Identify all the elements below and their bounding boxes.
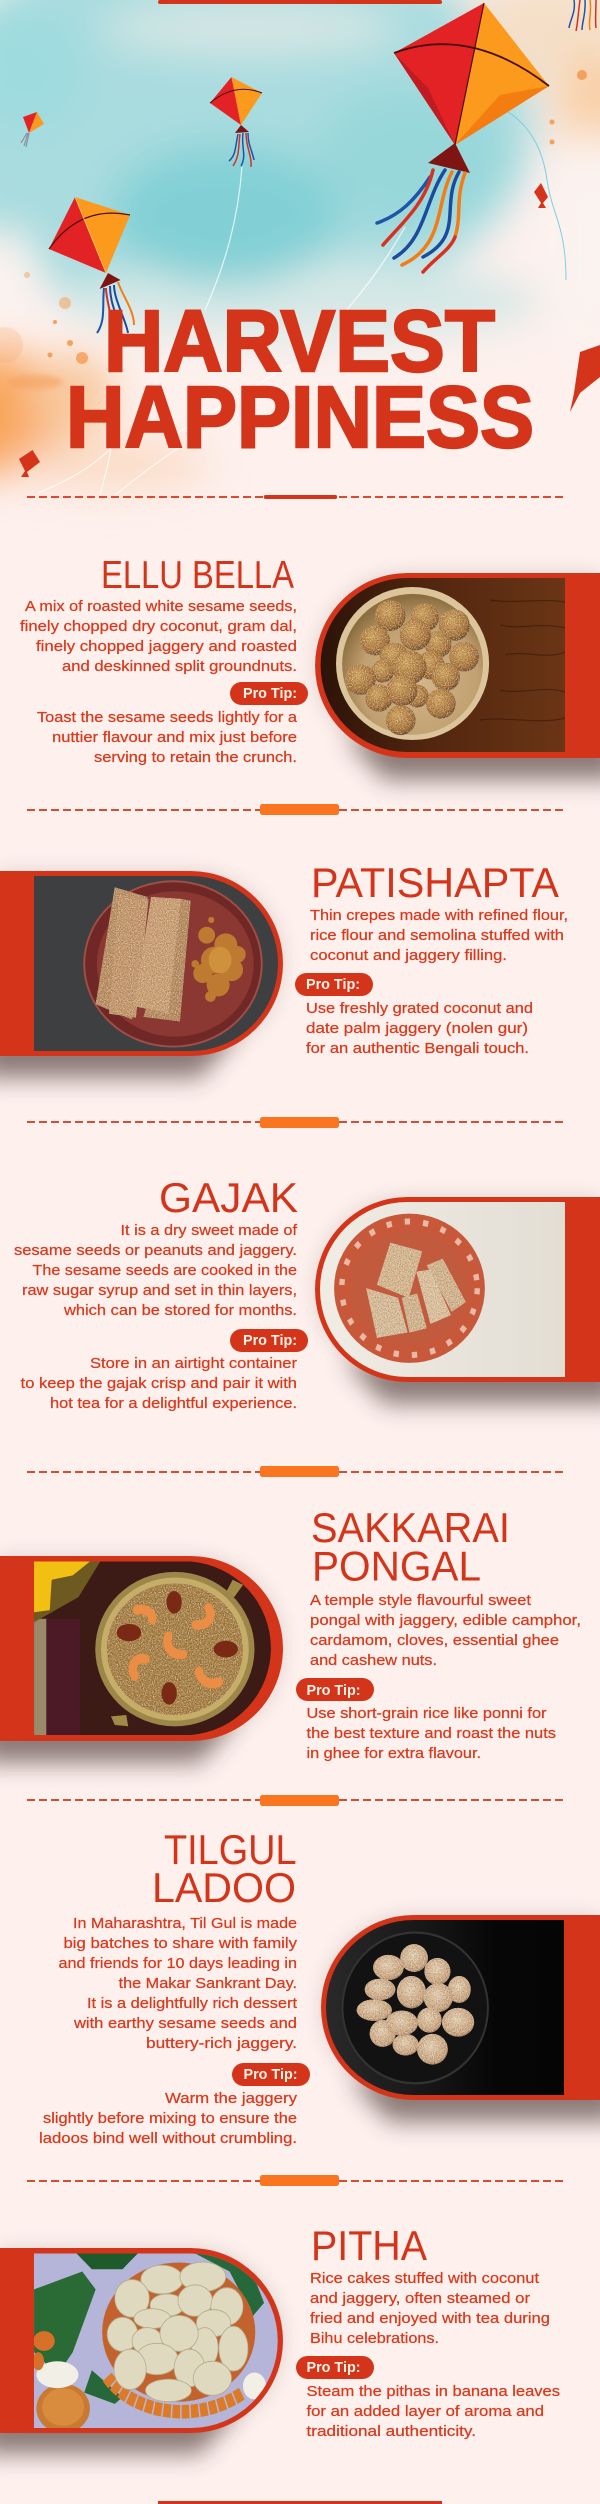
kite: lower left [49, 197, 134, 333]
image shadow [321, 1915, 600, 2122]
description: It is a delightfully rich dessert [87, 1995, 298, 2012]
food photo: pitha on clay plate [33, 2253, 284, 2433]
pro tip badge: Pro Tip: [306, 1682, 360, 1699]
pro tip badge [296, 1678, 374, 1701]
description: rice flour and semolina stuffed with [310, 927, 564, 944]
description: big batches to share with family [64, 1935, 298, 1952]
kite: large top right [377, 3, 549, 272]
pro tip badge [296, 2356, 374, 2379]
pro tip badge: Pro Tip: [244, 2066, 298, 2083]
description: Rice cakes stuffed with coconut [310, 2270, 540, 2287]
divider 2 [27, 804, 563, 815]
heading: ELLU BELLA [101, 554, 294, 597]
description: and cashew nuts. [310, 1652, 437, 1669]
pro tip badge: Pro Tip: [306, 2359, 360, 2376]
description: finely chopped jaggery and roasted [36, 638, 297, 655]
icon: small kite bottom left [19, 450, 40, 477]
panel: sakkarai pongal [0, 1504, 581, 1763]
pro tip badge [232, 2063, 310, 2086]
divider 4 [27, 1466, 563, 1477]
description [58, 1915, 298, 2052]
description [310, 1592, 581, 1669]
pro tip badge: Pro Tip: [243, 1332, 297, 1349]
food photo: ladoos on black plate [321, 1920, 564, 2095]
heading: PONGAL [312, 1542, 481, 1590]
description [20, 598, 297, 675]
pro tip text: serving to retain the crunch. [94, 749, 297, 766]
description: the Makar Sankrant Day. [119, 1975, 297, 1992]
image frame [0, 871, 283, 1056]
description [310, 2270, 550, 2347]
description: The sesame seeds are cooked in the [32, 1262, 297, 1279]
pro tip text: in ghee for extra flavour. [306, 1745, 481, 1762]
pro tip text: traditional authenticity. [306, 2423, 476, 2440]
image shadow [0, 1556, 283, 1763]
pro tip text: Store in an airtight container [90, 1355, 297, 1372]
description: sesame seeds or peanuts and jaggery. [14, 1242, 297, 1259]
pro tip text: Warm the jaggery [165, 2090, 298, 2107]
pro tip text: nuttier flavour and mix just before [52, 729, 297, 746]
description: raw sugar syrup and set in thin layers, [22, 1282, 297, 1299]
panel: tilgul ladoo [39, 1826, 600, 2147]
pro tip text [306, 1000, 533, 1057]
pro tip badge [230, 682, 308, 705]
watercolor sky background [0, 0, 600, 490]
heading [152, 1826, 297, 1911]
top bar [158, 0, 442, 4]
description: and friends for 10 days leading in [58, 1955, 297, 1972]
description: finely chopped dry coconut, gram dal, [20, 618, 297, 635]
food photo: sesame balls in bowl [315, 578, 565, 752]
pro tip text [39, 2090, 298, 2147]
title: HAPPINESS [66, 369, 534, 466]
description: cardamom, cloves, essential ghee [310, 1632, 559, 1649]
heading: SAKKARAI [311, 1504, 510, 1551]
description: A mix of roasted white sesame seeds, [25, 598, 297, 615]
description [310, 907, 568, 964]
food photo: pongal in brass dish [34, 1561, 284, 1736]
heading: TILGUL [164, 1826, 297, 1873]
description [14, 1222, 298, 1319]
description: Bihu celebrations. [310, 2330, 439, 2347]
pro tip text: for an authentic Bengali touch. [306, 1040, 529, 1057]
kite: small left [21, 112, 44, 147]
pro tip badge: Pro Tip: [306, 976, 360, 993]
image frame [315, 1197, 600, 1382]
image shadow [315, 573, 600, 780]
description: which can be stored for months. [63, 1302, 297, 1319]
pro tip text: hot tea for a delightful experience. [50, 1395, 297, 1412]
pro tip badge [230, 1329, 308, 1352]
icon: small kite right [534, 183, 548, 208]
pro tip text: slightly before mixing to ensure the [43, 2110, 297, 2127]
heading: GAJAK [159, 1174, 298, 1221]
description: buttery-rich jaggery. [146, 2035, 297, 2052]
title [66, 293, 534, 466]
description: fried and enjoyed with tea during [310, 2310, 550, 2327]
pro tip text: the best texture and roast the nuts [306, 1725, 556, 1742]
panel: pitha [0, 2222, 560, 2454]
title: HARVEST [104, 293, 495, 390]
image frame [0, 2248, 283, 2433]
pro tip text [306, 2383, 560, 2440]
pro tip badge [295, 973, 373, 996]
heading: LADOO [152, 1864, 296, 1911]
pro tip text: for an added layer of aroma and [306, 2403, 544, 2420]
kite: middle [210, 77, 262, 167]
icon: edge kite right [570, 345, 600, 412]
heading: PITHA [311, 2222, 427, 2269]
description: pongal with jaggery, edible camphor, [310, 1612, 581, 1629]
divider 1 [27, 495, 563, 499]
pro tip text [37, 709, 298, 766]
divider 3 [27, 1117, 563, 1128]
pro tip text: to keep the gajak crisp and pair it with [21, 1375, 297, 1392]
pro tip text: ladoos bind well without crumbling. [39, 2130, 297, 2147]
heading [311, 1504, 510, 1590]
bottom bar [158, 2501, 442, 2504]
kite strings [38, 167, 405, 495]
pro tip text: Use freshly grated coconut and [306, 1000, 533, 1017]
panel: gajak [14, 1174, 600, 1412]
image frame [321, 1915, 600, 2100]
image shadow [315, 1197, 600, 1404]
image shadow [0, 2248, 283, 2454]
description: coconut and jaggery filling. [310, 947, 507, 964]
kite: tails top right corner [569, 0, 596, 31]
pro tip text: Steam the pithas in banana leaves [306, 2383, 560, 2400]
description: and jaggery, often steamed or [310, 2290, 530, 2307]
description: In Maharashtra, Til Gul is made [73, 1915, 297, 1932]
heading: PATISHAPTA [311, 859, 559, 906]
pro tip text: date palm jaggery (nolen gur) [306, 1020, 528, 1037]
pro tip text [21, 1355, 297, 1412]
food photo: gajak on plate [315, 1202, 565, 1377]
description: and deskinned split groundnuts. [62, 658, 297, 675]
pro tip text: Toast the sesame seeds lightly for a [37, 709, 298, 726]
pro tip text [306, 1705, 556, 1762]
pro tip badge: Pro Tip: [243, 685, 297, 702]
pro tip text: Use short-grain rice like ponni for [306, 1705, 547, 1722]
divider 6 [27, 2175, 563, 2186]
description: A temple style flavourful sweet [310, 1592, 532, 1609]
divider 5 [27, 1795, 563, 1806]
description: with earthy sesame seeds and [73, 2015, 297, 2032]
image shadow [0, 871, 283, 1078]
panel: ellu bella [20, 554, 600, 780]
food photo: crepes on plate [34, 876, 284, 1051]
description: It is a dry sweet made of [120, 1222, 298, 1239]
image frame [0, 1556, 283, 1741]
image frame [315, 573, 600, 758]
description: Thin crepes made with refined flour, [310, 907, 568, 924]
panel: patishapta [0, 859, 568, 1078]
